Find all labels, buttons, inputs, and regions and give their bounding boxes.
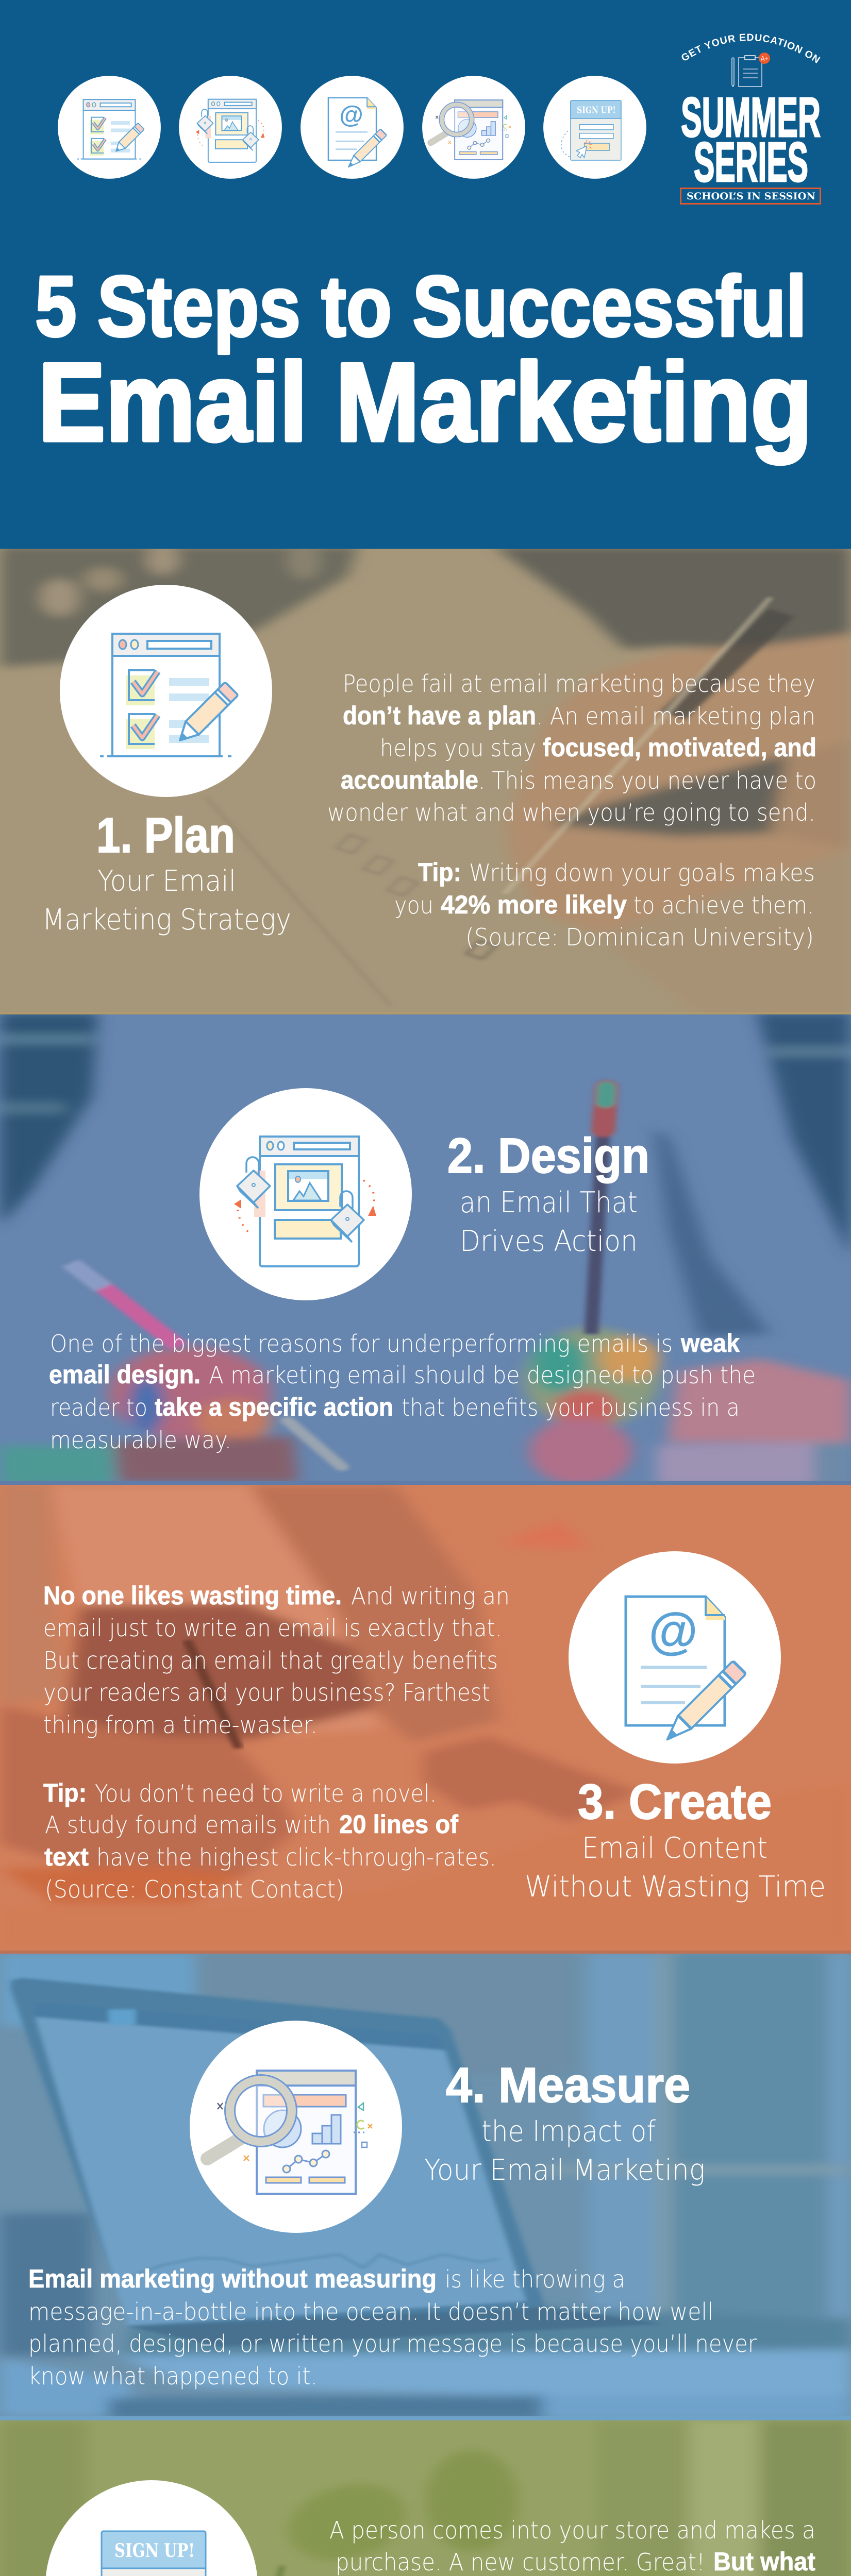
text: create description: No one likes wasting time. bbox=[43, 1581, 342, 1610]
text: create description bbox=[43, 1581, 510, 1739]
text: create description: And writing an bbox=[351, 1582, 510, 1610]
text: grow description: But what bbox=[713, 2547, 815, 2576]
text: measure description: planned, designed, or written your message is because you’ll never bbox=[28, 2330, 757, 2358]
panel: step 2 design bbox=[0, 1013, 851, 1485]
text: create tip bbox=[43, 1778, 496, 1903]
text: measure description bbox=[28, 2264, 757, 2390]
text: create tip: text bbox=[44, 1842, 89, 1871]
text: create tip: A study found emails with bbox=[45, 1811, 331, 1839]
icon: plan bbox=[60, 585, 272, 797]
text: design description: A marketing email should be designed to push the bbox=[209, 1361, 756, 1389]
heading: 2. Design: an Email That bbox=[460, 1186, 638, 1219]
text: create description: your readers and your business? Farthest bbox=[43, 1679, 490, 1706]
heading: 1. Plan: 1. Plan bbox=[96, 808, 235, 863]
text: plan description: . This means you never have to bbox=[478, 767, 816, 794]
heading: 4. Measure: 4. Measure bbox=[446, 2058, 690, 2113]
heading: 4. Measure: the Impact of bbox=[481, 2115, 656, 2148]
heading: 3. Create: Email Content bbox=[582, 1832, 767, 1865]
icon: grow: SIGN UP! bbox=[577, 105, 616, 115]
icon: create bbox=[301, 76, 404, 179]
icon: measure bbox=[190, 2021, 402, 2233]
text: plan description: accountable bbox=[341, 766, 478, 794]
icon: measure bbox=[422, 76, 525, 179]
text: plan tip: you bbox=[394, 891, 433, 919]
heading: 2. Design bbox=[447, 1128, 649, 1258]
text: create description: But creating an email that greatly benefits bbox=[43, 1647, 498, 1674]
text: design description: reader to bbox=[50, 1394, 147, 1421]
text: design description: take a specific action bbox=[155, 1393, 393, 1421]
text: design description bbox=[49, 1329, 756, 1454]
text: measure description: is like throwing a bbox=[445, 2265, 625, 2293]
logo clipboard icon bbox=[732, 53, 770, 87]
text: plan description: focused, motivated, and bbox=[543, 733, 816, 762]
heading: 3. Create: 3. Create bbox=[578, 1774, 772, 1829]
text: grow description: purchase. A new customer. Great! bbox=[336, 2548, 705, 2576]
icon: grow bbox=[543, 76, 646, 179]
text: create description: thing from a time-waster. bbox=[43, 1711, 318, 1739]
text: create tip: Tip: bbox=[43, 1778, 87, 1807]
text: measure description: know what happened to it. bbox=[28, 2362, 318, 2390]
icon: grow bbox=[45, 2480, 258, 2576]
text: create tip: You don’t need to write a novel. bbox=[95, 1780, 437, 1807]
icon: plan bbox=[58, 76, 161, 179]
text: measure description: Email marketing without measuring bbox=[28, 2264, 437, 2293]
icon: create bbox=[569, 1551, 781, 1764]
text: plan tip: Tip: bbox=[418, 858, 461, 887]
heading: 4. Measure: Your Email Marketing bbox=[424, 2154, 705, 2187]
text: create tip: have the highest click-through-rates. bbox=[96, 1843, 496, 1871]
icon: create: @ bbox=[648, 1602, 698, 1659]
photo background: painter with brushes bbox=[0, 1013, 851, 1485]
text: plan tip: 42% more likely bbox=[441, 890, 627, 919]
heading: 1. Plan bbox=[42, 808, 291, 937]
Summer Series logo bbox=[680, 34, 821, 205]
text: design description: that benefits your business in a bbox=[402, 1394, 740, 1421]
heading: 1. Plan: Marketing Strategy bbox=[42, 903, 291, 937]
heading: 2. Design: Drives Action bbox=[460, 1225, 638, 1258]
text: design description: One of the biggest reasons for underperforming emails is bbox=[50, 1330, 673, 1358]
heading: 3. Create: Without Wasting Time bbox=[525, 1870, 826, 1904]
logo clipboard icon: A+ bbox=[761, 55, 768, 62]
panel: step 1 plan bbox=[0, 543, 851, 1020]
text: plan description: don’t have a plan bbox=[343, 701, 536, 730]
photo background: seedlings bbox=[0, 2420, 851, 2576]
text: plan tip bbox=[394, 858, 815, 951]
text: design description: email design. bbox=[49, 1360, 201, 1389]
heading: 2. Design: 2. Design bbox=[447, 1128, 649, 1183]
text: plan description bbox=[327, 670, 816, 826]
heading: 3. Create bbox=[525, 1774, 826, 1904]
text: grow description bbox=[286, 2516, 815, 2576]
text: create description: email just to write an email is exactly that. bbox=[43, 1614, 502, 1642]
text: plan description: helps you stay bbox=[380, 734, 536, 762]
icon: design bbox=[179, 76, 282, 179]
photo background: laptop with reports bbox=[0, 1954, 851, 2420]
text: plan description: wonder what and when you’re going to send. bbox=[327, 799, 815, 826]
text: plan description: . An email marketing plan bbox=[536, 702, 815, 730]
text: design description: measurable way. bbox=[50, 1426, 231, 1454]
heading: 4. Measure bbox=[424, 2058, 705, 2187]
text: plan tip: Writing down your goals makes bbox=[469, 859, 815, 887]
photo background: hands writing bbox=[0, 1485, 851, 1954]
header bbox=[35, 34, 821, 466]
text: plan tip: to achieve them. bbox=[633, 891, 814, 919]
header icon row bbox=[58, 76, 646, 179]
logo arc text: GET YOUR EDUCATION ON bbox=[681, 34, 821, 63]
panel: step 4 measure bbox=[0, 1954, 851, 2420]
Summer Series logo: SCHOOL’S IN SESSION bbox=[687, 191, 815, 202]
title bbox=[35, 259, 812, 464]
text: plan description: People fail at email marketing because they bbox=[343, 670, 815, 698]
text: create tip: (Source: Constant Contact) bbox=[45, 1875, 344, 1903]
icon: design bbox=[199, 1088, 412, 1300]
text: plan tip: (Source: Dominican University) bbox=[465, 923, 814, 951]
panel: step 5 grow bbox=[0, 2420, 851, 2576]
text: grow description: A person comes into your store and makes a bbox=[329, 2516, 815, 2544]
icon: create: @ bbox=[339, 101, 363, 128]
text: design description: weak bbox=[680, 1329, 740, 1358]
panel: step 3 create bbox=[0, 1485, 851, 1954]
text: create tip: 20 lines of bbox=[339, 1810, 458, 1839]
text: measure description: message-in-a-bottle into the ocean. It doesn’t matter how well bbox=[28, 2298, 713, 2326]
icon: grow: SIGN UP! bbox=[114, 2540, 195, 2562]
photo background: writing in notebook bbox=[0, 543, 851, 1020]
heading: 1. Plan: Your Email bbox=[97, 865, 236, 898]
